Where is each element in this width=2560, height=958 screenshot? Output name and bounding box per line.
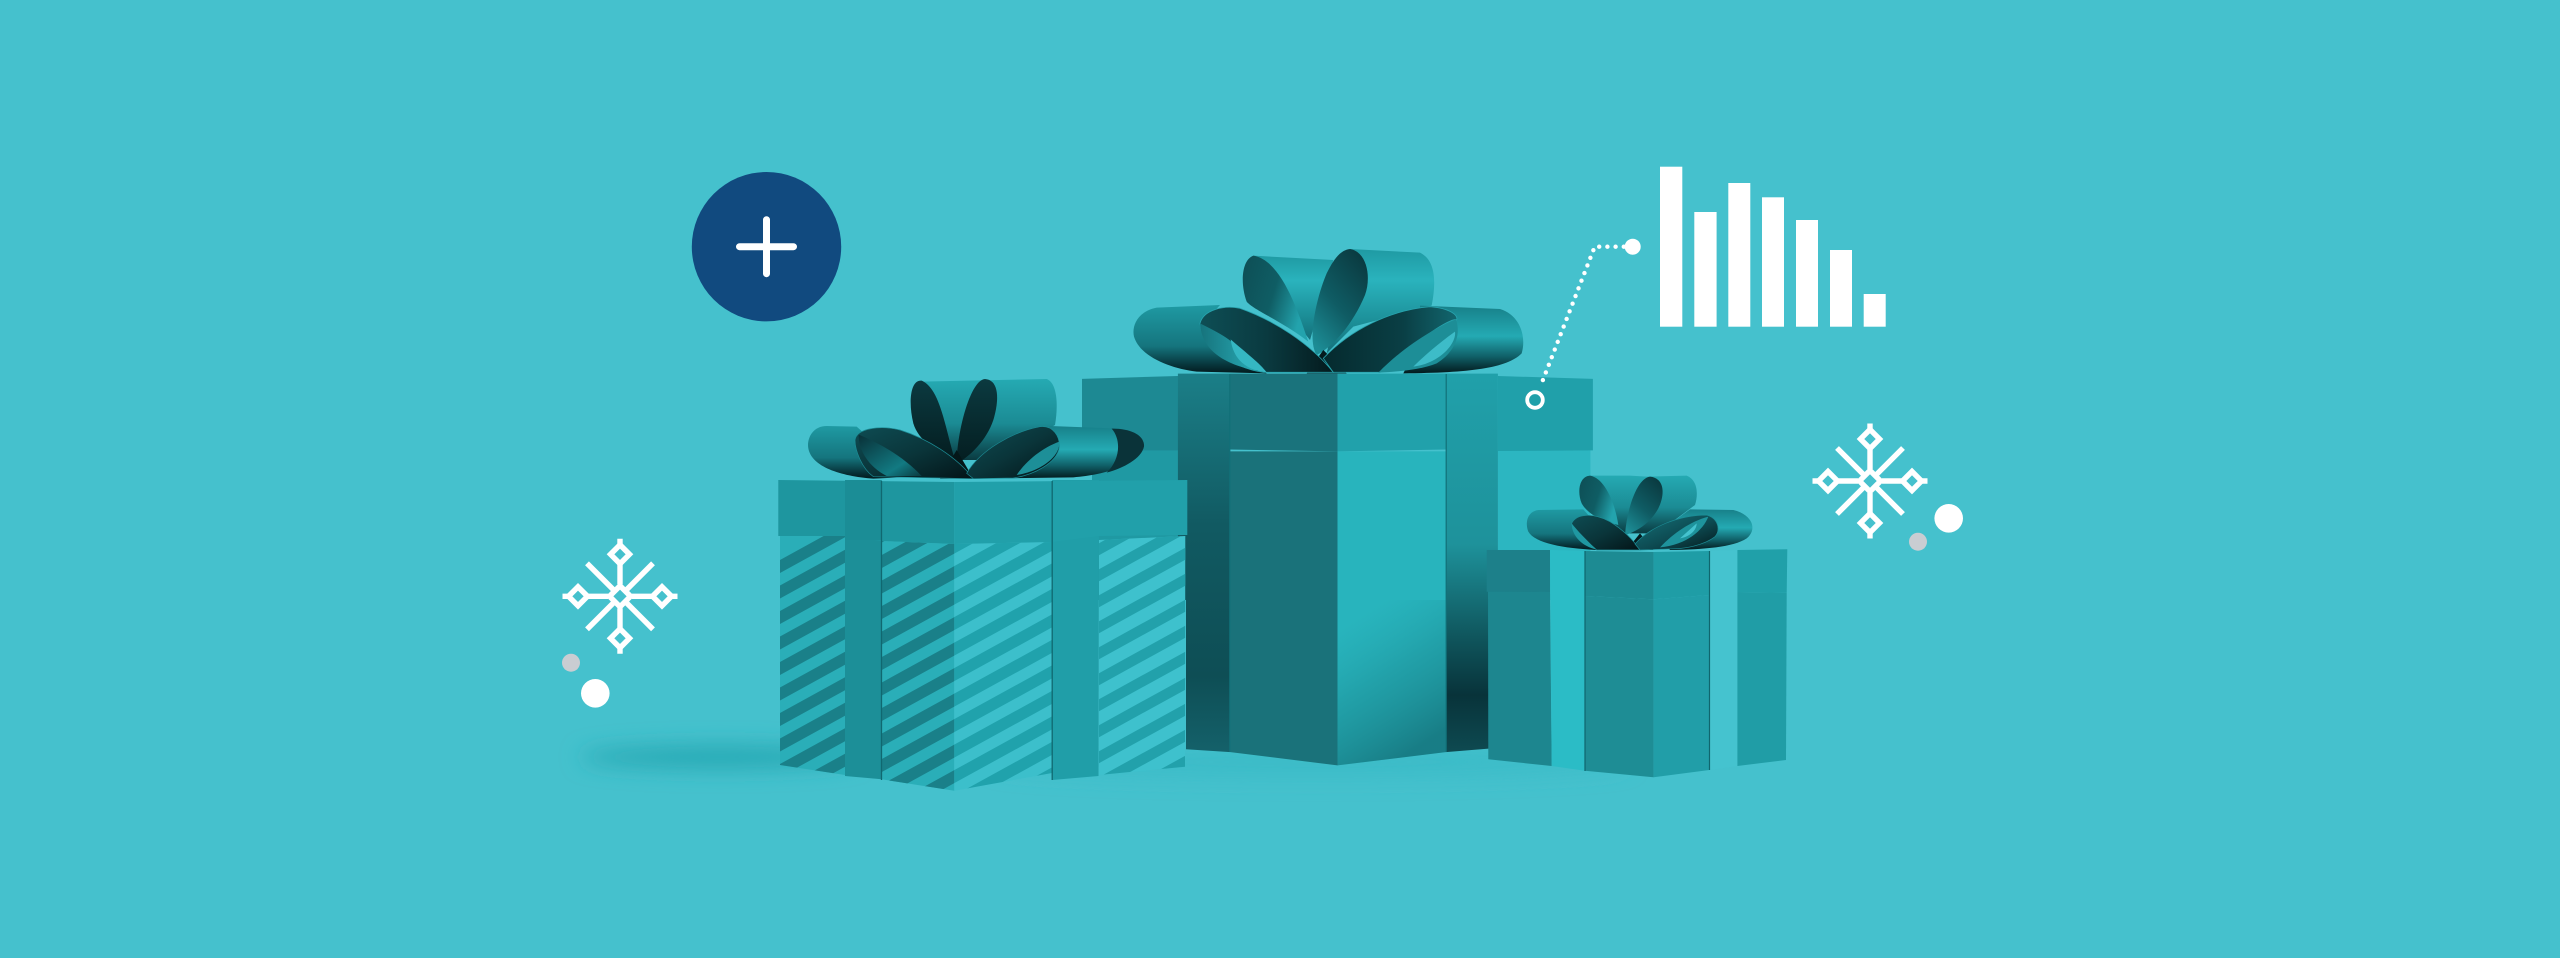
left petal fold bbox=[1200, 323, 1263, 372]
left horizontal loop bbox=[1133, 305, 1267, 373]
middle ribbon left bbox=[1178, 374, 1230, 752]
gift: middle bbox=[1082, 374, 1593, 765]
right front petal bbox=[967, 427, 1059, 479]
left front petal bbox=[1572, 515, 1640, 550]
back petal left bbox=[1579, 476, 1618, 525]
left gift panels base bbox=[780, 536, 1185, 791]
dot: grey right bbox=[1909, 533, 1927, 551]
left petal inner sweep bbox=[859, 435, 922, 476]
dot: white left bbox=[581, 679, 610, 708]
right gift ribbons bbox=[1550, 550, 1737, 771]
left back petal bbox=[1243, 256, 1308, 342]
back petal left bbox=[911, 381, 955, 460]
left front petal bbox=[855, 428, 973, 479]
middle front right face bbox=[1338, 451, 1446, 765]
right horizontal loop bbox=[1657, 509, 1752, 550]
middle body sides bbox=[1092, 450, 1590, 600]
bar chart bbox=[1660, 167, 1886, 327]
icon: plus button bbox=[692, 172, 841, 321]
bow centre bbox=[1307, 350, 1347, 373]
right hole bbox=[1413, 332, 1455, 367]
bow: middle gift bbox=[1133, 249, 1523, 373]
ground shadow bbox=[580, 746, 1630, 776]
right hole bbox=[1680, 523, 1697, 538]
middle lid sides bbox=[1082, 376, 1593, 451]
connector: dotted line bbox=[1527, 239, 1641, 408]
right back petal bbox=[1313, 249, 1368, 355]
icon: snowflake right bbox=[1812, 424, 1928, 538]
right face stripes bbox=[954, 542, 1052, 788]
right petal inner bbox=[1017, 442, 1059, 475]
icon: snowflake left bbox=[562, 539, 678, 654]
back loops bbox=[913, 379, 1057, 460]
bow centre bbox=[940, 450, 973, 479]
right panel stripes bbox=[1099, 536, 1186, 774]
left hole bbox=[1231, 339, 1267, 372]
right gift lid bbox=[1487, 549, 1787, 599]
left face stripes bbox=[780, 536, 954, 789]
right petal fold bbox=[1378, 319, 1458, 373]
dot: grey left bbox=[562, 654, 580, 672]
right petal fold bbox=[1660, 517, 1708, 547]
right horizontal loop bbox=[973, 426, 1144, 479]
bow centre bbox=[1627, 533, 1653, 550]
left gift ribbons bbox=[845, 480, 1099, 780]
middle front left face bbox=[1230, 451, 1338, 765]
left back band bbox=[1253, 256, 1333, 340]
back petal right bbox=[1625, 477, 1663, 535]
middle ribbon right bbox=[1446, 374, 1498, 752]
left petal fold bbox=[1572, 523, 1596, 549]
right front petal bbox=[1635, 515, 1718, 550]
right gift body bbox=[1488, 590, 1787, 777]
right horizontal loop bbox=[1403, 306, 1523, 373]
right back band bbox=[1327, 249, 1434, 353]
dot: white right bbox=[1934, 504, 1963, 533]
back petal right bbox=[957, 379, 997, 463]
right loop inner end bbox=[1107, 429, 1144, 473]
bow: left gift bbox=[808, 379, 1144, 479]
right front petal bbox=[1323, 307, 1457, 372]
back loops bbox=[1580, 476, 1697, 533]
left horizontal loop bbox=[808, 426, 913, 479]
left gift lid bbox=[778, 480, 1187, 780]
gift: left bbox=[778, 480, 1188, 791]
left front petal bbox=[1200, 307, 1333, 372]
middle lid front bbox=[1230, 374, 1446, 752]
bow: right gift bbox=[1527, 476, 1752, 550]
gift: right bbox=[1487, 549, 1787, 777]
left horizontal loop bbox=[1527, 509, 1610, 550]
